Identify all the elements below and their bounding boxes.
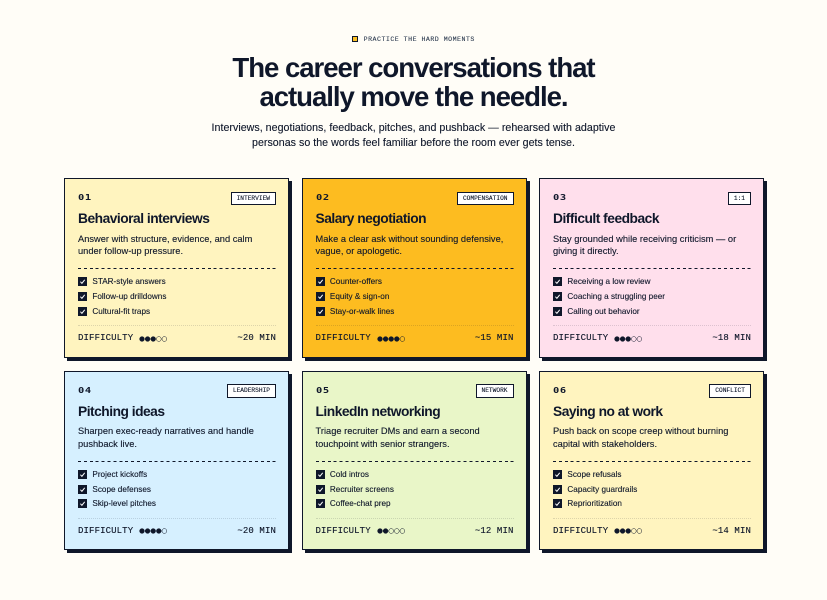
card description bbox=[316, 234, 503, 256]
checklist: Scope defenses bbox=[92, 484, 151, 494]
checklist: Cold intros bbox=[330, 470, 369, 478]
tag: LEADERSHIP bbox=[233, 387, 270, 394]
card description: touchpoint with senior strangers. bbox=[316, 439, 450, 449]
checklist: Calling out behavior bbox=[567, 306, 640, 316]
card heading: Behavioral interviews bbox=[78, 211, 209, 226]
difficulty and duration bbox=[316, 333, 514, 343]
tag: INTERVIEW bbox=[237, 195, 270, 202]
card description bbox=[78, 234, 252, 256]
tag bbox=[728, 192, 751, 205]
card description: capital with stakeholders. bbox=[553, 439, 657, 449]
checklist: Capacity guardrails bbox=[567, 484, 637, 494]
tag bbox=[231, 192, 276, 205]
difficulty and duration: ~14 MIN bbox=[712, 526, 751, 536]
difficulty and duration: DIFFICULTY bbox=[78, 333, 133, 343]
difficulty and duration: ~20 MIN bbox=[237, 526, 276, 536]
panel: pitching ideas bbox=[64, 370, 289, 550]
difficulty and duration: DIFFICULTY bbox=[553, 333, 608, 343]
checklist bbox=[553, 470, 638, 508]
card description bbox=[553, 234, 736, 256]
difficulty and duration: DIFFICULTY bbox=[316, 333, 371, 343]
card description: vague, or apologetic. bbox=[316, 246, 402, 256]
panel: salary negotiation bbox=[302, 178, 526, 358]
checklist bbox=[78, 277, 166, 316]
difficulty and duration: DIFFICULTY bbox=[78, 526, 133, 536]
difficulty and duration bbox=[78, 526, 276, 536]
difficulty and duration bbox=[78, 333, 276, 343]
difficulty and duration: ~20 MIN bbox=[237, 333, 276, 343]
card number: 01 bbox=[78, 193, 92, 202]
title bbox=[232, 52, 596, 112]
card description: Triage recruiter DMs and earn a second bbox=[316, 426, 480, 436]
checklist bbox=[316, 277, 394, 316]
tag: COMPENSATION bbox=[463, 195, 508, 202]
subtitle bbox=[212, 122, 615, 148]
card description: Make a clear ask without sounding defensive, bbox=[316, 234, 503, 244]
card heading: Salary negotiation bbox=[316, 211, 426, 226]
card description: pushback live. bbox=[78, 439, 137, 449]
card description: Push back on scope creep without burning bbox=[553, 426, 728, 436]
checklist: Recruiter screens bbox=[330, 484, 394, 494]
title: actually move the needle. bbox=[259, 81, 568, 112]
tag bbox=[476, 384, 514, 398]
difficulty and duration bbox=[553, 526, 751, 536]
panel: saying no at work bbox=[539, 370, 764, 550]
checklist: Project kickoffs bbox=[92, 470, 147, 478]
tag bbox=[227, 384, 276, 398]
checklist: Receiving a low review bbox=[567, 277, 650, 286]
checklist: Reprioritization bbox=[567, 499, 622, 508]
card description bbox=[78, 426, 254, 449]
checklist bbox=[78, 470, 156, 508]
checklist bbox=[553, 277, 665, 316]
checklist: Scope refusals bbox=[567, 470, 621, 478]
tag: 1:1 bbox=[734, 195, 745, 202]
checklist: Equity & sign-on bbox=[330, 292, 389, 301]
card number: 06 bbox=[553, 386, 567, 394]
eyebrow: PRACTICE THE HARD MOMENTS bbox=[364, 36, 475, 43]
checklist: Follow-up drilldowns bbox=[92, 292, 166, 301]
checklist: Cultural-fit traps bbox=[92, 306, 150, 316]
difficulty and duration: ~12 MIN bbox=[475, 526, 514, 536]
subtitle: personas so the words feel familiar before the room ever gets tense. bbox=[252, 136, 575, 148]
subtitle: Interviews, negotiations, feedback, pitches, and pushback — rehearsed with adaptive bbox=[212, 122, 615, 134]
difficulty and duration: ~15 MIN bbox=[475, 333, 514, 343]
card description: giving it directly. bbox=[553, 246, 619, 256]
title: The career conversations that bbox=[232, 52, 595, 83]
checklist: Counter-offers bbox=[330, 277, 382, 286]
tag bbox=[709, 384, 751, 398]
card description: under follow-up pressure. bbox=[78, 246, 183, 256]
checklist: Coaching a struggling peer bbox=[567, 292, 665, 301]
card number: 05 bbox=[316, 386, 329, 394]
checklist: Skip-level pitches bbox=[92, 499, 156, 508]
difficulty and duration bbox=[316, 526, 514, 536]
panel: difficult feedback bbox=[539, 178, 764, 358]
checklist: STAR-style answers bbox=[92, 277, 166, 286]
checklist: Stay-or-walk lines bbox=[330, 306, 394, 316]
checklist bbox=[316, 470, 394, 508]
tag bbox=[457, 192, 514, 205]
checklist: Coffee-chat prep bbox=[330, 499, 391, 508]
difficulty and duration: DIFFICULTY bbox=[553, 526, 608, 536]
card heading: Difficult feedback bbox=[553, 211, 659, 226]
card description: Sharpen exec-ready narratives and handle bbox=[78, 426, 254, 436]
card description bbox=[553, 426, 728, 449]
difficulty and duration: DIFFICULTY bbox=[316, 526, 371, 536]
card description: Answer with structure, evidence, and calm bbox=[78, 234, 252, 244]
card number: 02 bbox=[316, 193, 329, 202]
tag: NETWORK bbox=[482, 387, 508, 394]
card heading: LinkedIn networking bbox=[316, 404, 440, 418]
card description: Stay grounded while receiving criticism — or bbox=[553, 234, 736, 244]
card heading: Pitching ideas bbox=[78, 404, 165, 418]
tag: CONFLICT bbox=[715, 387, 745, 394]
card heading: Saying no at work bbox=[553, 404, 663, 418]
card description bbox=[316, 426, 480, 449]
difficulty and duration: ~18 MIN bbox=[712, 333, 751, 343]
panel: linkedin networking bbox=[302, 370, 526, 550]
card number: 03 bbox=[553, 193, 567, 202]
difficulty and duration bbox=[553, 333, 751, 343]
panel: behavioral interviews bbox=[64, 178, 289, 358]
card number: 04 bbox=[78, 386, 92, 394]
